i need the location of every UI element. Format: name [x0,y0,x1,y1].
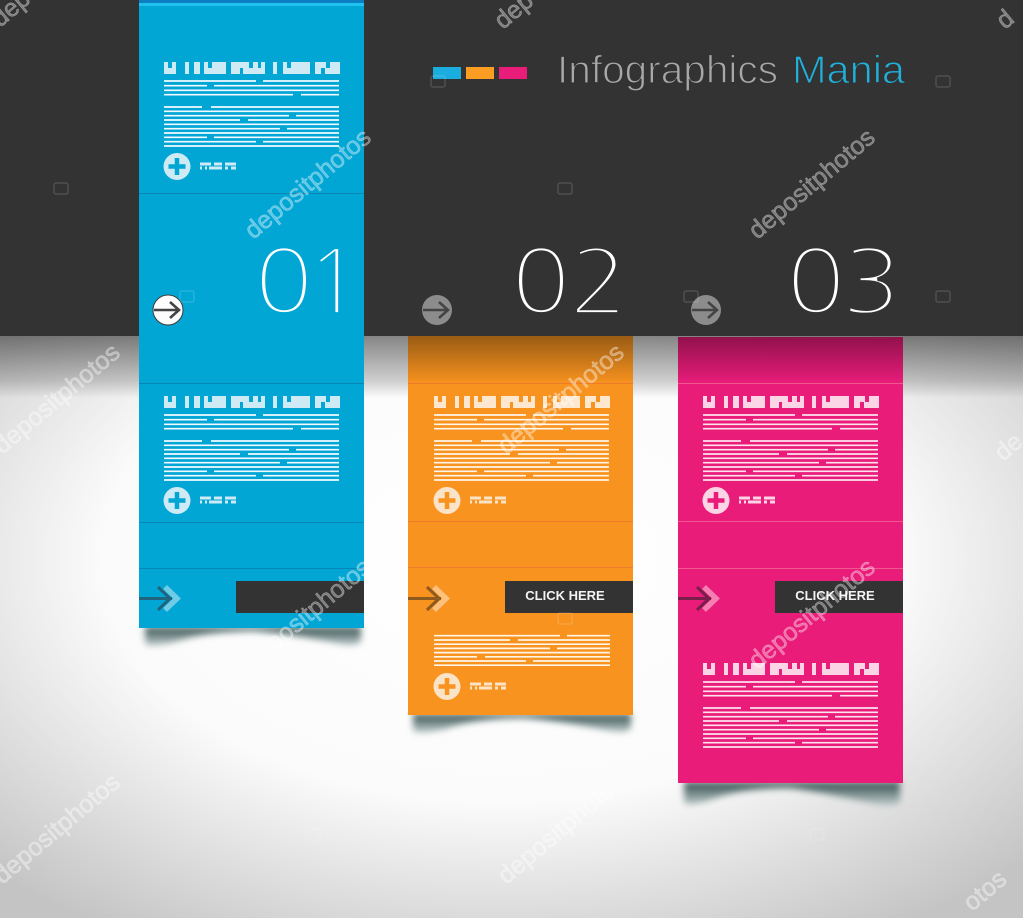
icon: double arrow, pink [678,587,716,610]
icon: plus, pink [702,487,775,514]
title: Mania [792,49,905,92]
header band [0,0,1023,336]
icon: plus, orange lower [434,673,506,700]
watermark: depositphotos [743,553,880,675]
watermark: otos [958,865,1012,917]
button: click here, pink: CLICK HERE [795,588,875,603]
watermark: small camera marks [54,76,950,840]
icon: double arrow, blue [139,587,177,610]
watermark: d [991,4,1020,35]
watermark: depositphotos [239,553,376,675]
icon: plus, blue lower [164,487,236,514]
background: light lower area [0,336,1023,918]
panel: blue column 01 [139,0,364,628]
button: click here, orange: CLICK HERE [525,588,605,603]
text block: pink upper [703,399,879,480]
text block: blue top [164,65,340,146]
number 01: 01 [254,238,363,327]
title: Infographics [557,49,778,92]
shadow under orange card [413,714,631,733]
watermark: depositphotos [743,123,880,245]
icon: arrow circle, active [153,295,183,325]
number 02: 02 [511,238,628,327]
shadow under blue card [145,627,361,646]
icon: double arrow, orange [408,587,446,610]
icon: arrow circle 02 [422,295,452,325]
text block: pink lower [703,666,879,747]
button: blue, no label [236,581,364,613]
background: shadow below header band [0,336,1023,398]
watermark: depositphotos [492,768,629,890]
button: click here, orange [505,581,633,613]
watermark: depositphotos [492,338,629,460]
shadow under pink card [684,782,900,806]
text block: blue lower [164,399,340,480]
legend: three colour bars [433,67,527,79]
panel: pink column 03 [678,337,903,783]
text block: orange lower [434,636,610,665]
button: click here, pink [775,581,903,613]
panel: orange column 02 [408,336,633,715]
text block: orange upper [434,399,610,480]
icon: plus, blue top [164,153,236,180]
icon: arrow circle 03 [691,295,721,325]
icon: plus, orange upper [434,487,506,514]
title [557,49,905,92]
watermark: depositphotos [239,123,376,245]
number 03: 03 [786,238,901,327]
